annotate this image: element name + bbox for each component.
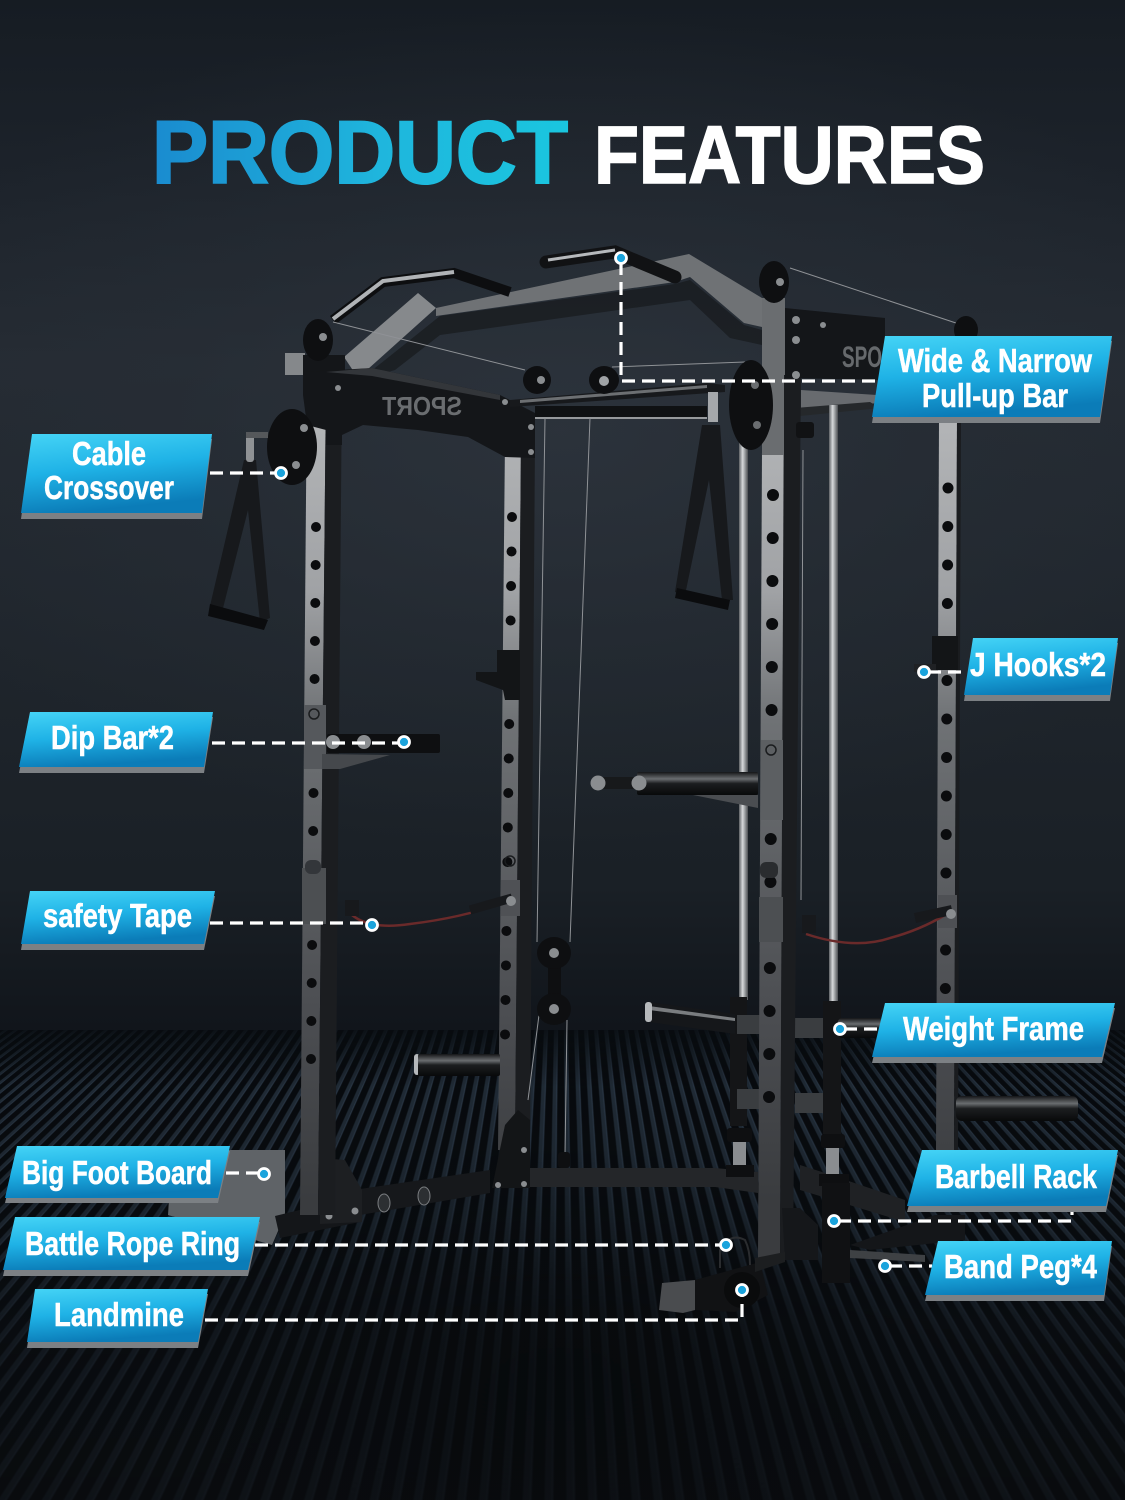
leader line: barbell rack: [838, 1205, 1072, 1221]
background wall: [0, 0, 1125, 1040]
leader line: band peg: [889, 1264, 932, 1268]
label: wide and narrow pull-up bar: [872, 336, 1112, 423]
front left upright: [300, 380, 342, 1215]
back top bar: [510, 383, 880, 419]
label: dip bar: Dip Bar*2: [51, 719, 174, 756]
pulleys: [267, 261, 978, 1168]
j hooks: [476, 636, 958, 700]
foot board: [168, 1150, 285, 1245]
label: battle rope ring: Battle Rope Ring: [25, 1225, 240, 1262]
label: safety tape: [21, 891, 215, 950]
label: cable crossover: Crossover: [44, 469, 174, 506]
leader line: big foot board: [226, 1171, 260, 1175]
label: landmine: [27, 1289, 208, 1348]
marker dots: [258, 252, 930, 1296]
leader line: landmine: [205, 1293, 742, 1320]
leader line: safety tape: [210, 921, 370, 925]
leader line: dip bar: [212, 741, 402, 745]
safety straps: [345, 896, 956, 943]
label: barbell rack: [907, 1150, 1118, 1212]
label: weight frame: [872, 1003, 1115, 1063]
label: cable crossover: [21, 434, 212, 519]
label: dip bar: [19, 712, 213, 773]
label: j hooks: [964, 638, 1118, 701]
front right upright: SPO: [842, 341, 882, 374]
front right upright: [758, 298, 885, 1260]
smith bars: [726, 405, 850, 1283]
base frame: [275, 1110, 965, 1262]
label: landmine: Landmine: [54, 1296, 184, 1333]
title: FEATURES: [594, 110, 985, 201]
dip bars: [322, 734, 758, 808]
ribbed rubber floor: [0, 1030, 1125, 1500]
left handle strap: [208, 432, 270, 630]
cables: [333, 268, 962, 1155]
back right upright: [936, 420, 961, 1150]
leader line: cable crossover: [210, 471, 278, 475]
label: big foot board: Big Foot Board: [22, 1154, 212, 1191]
label: band peg: [925, 1241, 1112, 1301]
right handle strap: [675, 392, 733, 610]
weight plate pegs: [414, 1002, 1078, 1121]
label: safety tape: safety Tape: [43, 897, 192, 934]
title: [152, 102, 985, 202]
label: cable crossover: Cable: [72, 435, 146, 472]
floor shading: [0, 1030, 1125, 1500]
top left cap and arch crossbar: [285, 353, 535, 458]
label: weight frame: Weight Frame: [903, 1010, 1084, 1047]
top left cap and arch crossbar: SPORT: [382, 391, 462, 421]
label: j hooks: J Hooks*2: [970, 646, 1106, 683]
leader line: j hooks: [928, 670, 972, 674]
label: wide and narrow pull-up bar: Pull-up Bar: [922, 377, 1068, 414]
leader line: weight frame: [844, 1027, 882, 1031]
leader line: pull-up bar: [621, 262, 880, 381]
power rack illustration: [168, 250, 1078, 1313]
label: big foot board: [5, 1146, 230, 1203]
back left upright: [498, 440, 535, 1150]
pull-up bar frame: [333, 250, 762, 380]
landmine and battle rope ring: [659, 1238, 785, 1313]
label: battle rope ring: [3, 1217, 260, 1276]
leader line: battle rope ring: [255, 1243, 724, 1247]
title: PRODUCT: [152, 102, 568, 202]
label: band peg: Band Peg*4: [944, 1248, 1098, 1285]
